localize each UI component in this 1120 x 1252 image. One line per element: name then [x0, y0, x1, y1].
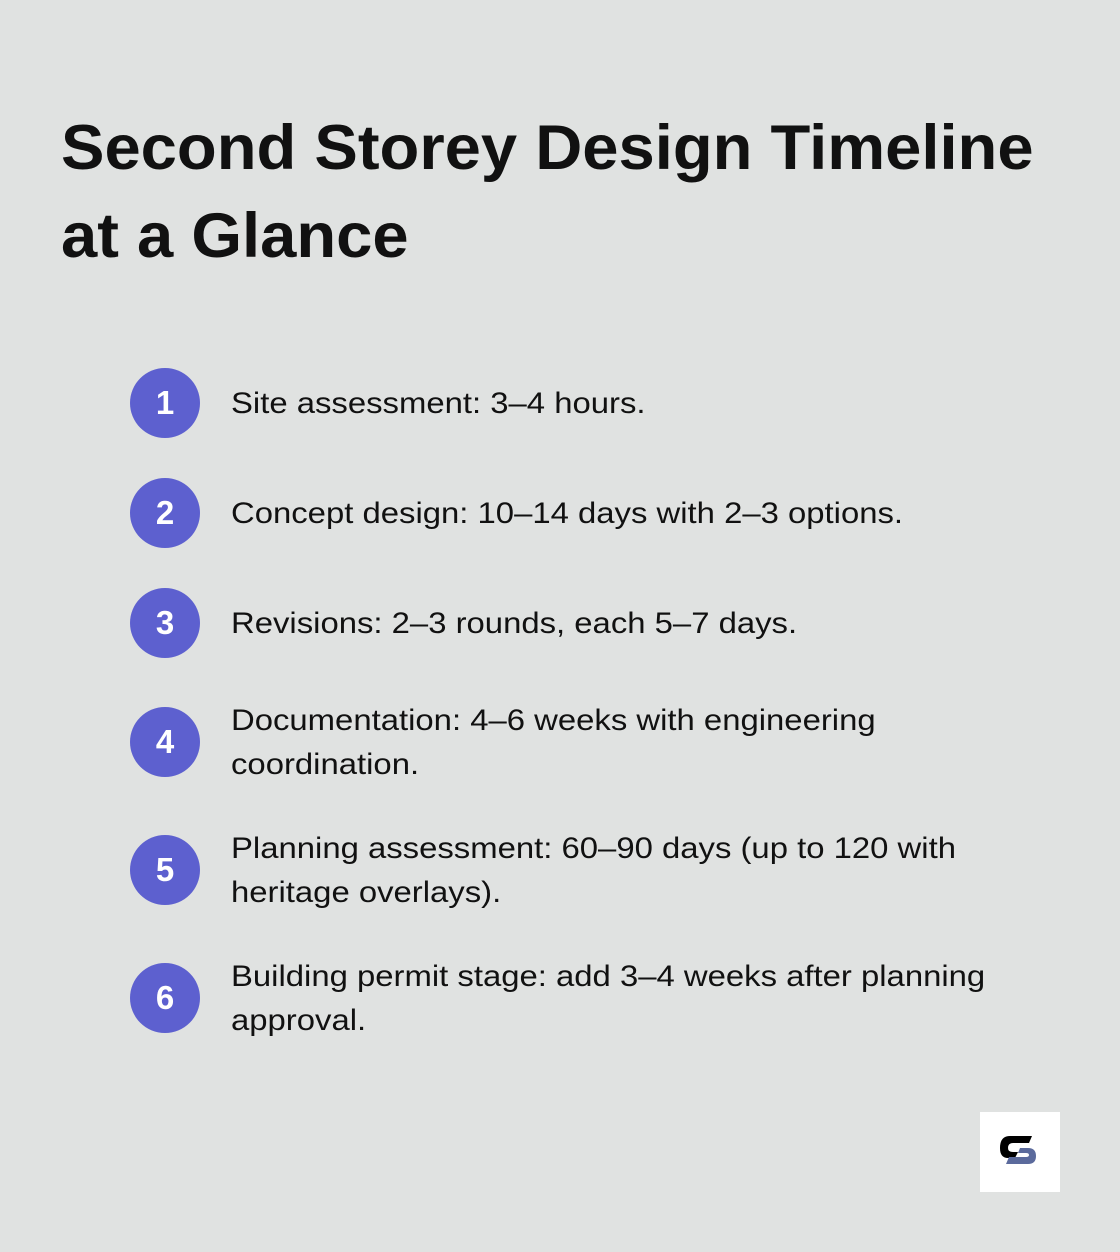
- step 1: 1: [156, 384, 174, 421]
- step 3: Revisions: 2–3 rounds, each 5–7 days.: [231, 607, 797, 640]
- step 2: Concept design: 10–14 days with 2–3 options.: [231, 497, 903, 530]
- step 6: approval.: [231, 1004, 366, 1037]
- step 6: [130, 960, 985, 1037]
- step 5: 5: [156, 851, 174, 888]
- step 1: Site assessment: 3–4 hours.: [231, 387, 645, 420]
- title: Second Storey Design Timeline: [61, 113, 1034, 183]
- step 3: [130, 588, 797, 658]
- step 4: 4: [156, 723, 174, 760]
- step 5: heritage overlays).: [231, 876, 501, 909]
- step 6: Building permit stage: add 3–4 weeks after planning: [231, 960, 985, 993]
- step 2: 2: [156, 494, 174, 531]
- step 3: 3: [156, 604, 174, 641]
- step 6: 6: [156, 979, 174, 1016]
- step 4: coordination.: [231, 748, 419, 781]
- step 1: [130, 368, 645, 438]
- step 5: [130, 832, 956, 909]
- title: [61, 113, 1034, 271]
- title: at a Glance: [61, 201, 409, 271]
- step 4: [130, 704, 876, 781]
- step 4: Documentation: 4–6 weeks with engineering: [231, 704, 876, 737]
- step 5: Planning assessment: 60–90 days (up to 120 with: [231, 832, 956, 865]
- step 2: [130, 478, 903, 548]
- logo: [980, 1112, 1060, 1192]
